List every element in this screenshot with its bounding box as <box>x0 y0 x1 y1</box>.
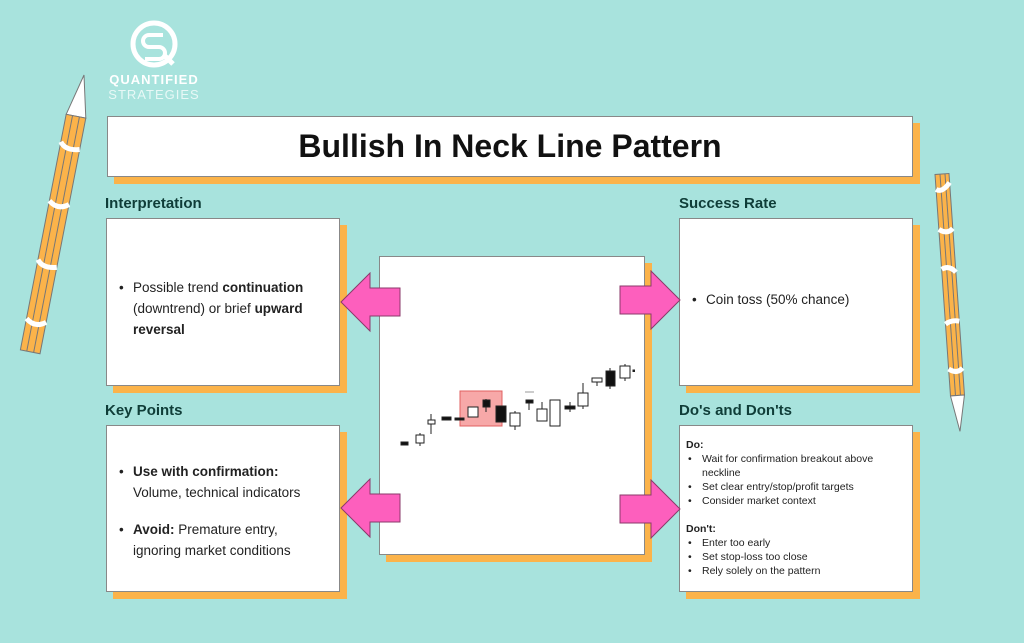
logo: STRATEGIES <box>108 87 200 102</box>
panel: success rate <box>679 218 913 386</box>
title: Bullish In Neck Line Pattern <box>298 128 722 164</box>
heading: Do's and Don'ts: Do's and Don'ts <box>679 402 792 419</box>
panel: do's and don'ts: Do: <box>686 439 704 451</box>
panel: do's and don'ts: Don't: <box>686 523 716 535</box>
arrow: to success rate <box>620 270 681 330</box>
panel: do's and don'ts <box>679 425 913 592</box>
panel: do's and don'ts: Wait for confirmation breakout above neckline <box>702 453 873 479</box>
title <box>107 116 913 177</box>
panel: do's and don'ts: Enter too early <box>702 537 770 549</box>
pencil: right <box>934 173 965 432</box>
panel: interpretation <box>106 218 340 386</box>
heading: Key Points: Key Points <box>105 402 183 419</box>
panel: do's and don'ts: Set stop-loss too close <box>702 551 808 563</box>
logo: QUANTIFIED <box>109 72 199 87</box>
logo <box>108 20 200 102</box>
heading: Interpretation: Interpretation <box>105 195 202 212</box>
panel: do's and don'ts: Rely solely on the pattern <box>702 565 820 577</box>
panel: key points <box>106 425 340 592</box>
panel: interpretation: Possible trend continuation (downtrend) or brief upward reversal <box>133 280 303 337</box>
pencil: left <box>20 74 86 354</box>
arrow: to key points <box>340 478 400 538</box>
arrow: to interpretation <box>340 272 400 332</box>
panel: do's and don'ts: Set clear entry/stop/profit targets <box>702 481 854 493</box>
panel: key points: Avoid: Premature entry, ignoring market conditions <box>133 522 291 558</box>
panel: key points: Use with confirmation: Volume, technical indicators <box>133 464 300 500</box>
chart: candlestick panel <box>379 256 645 555</box>
heading: Success Rate: Success Rate <box>679 195 777 212</box>
panel: do's and don'ts: Consider market context <box>702 495 816 507</box>
arrow: to do's and don'ts <box>620 479 681 540</box>
panel: success rate: Coin toss (50% chance) <box>706 292 849 307</box>
